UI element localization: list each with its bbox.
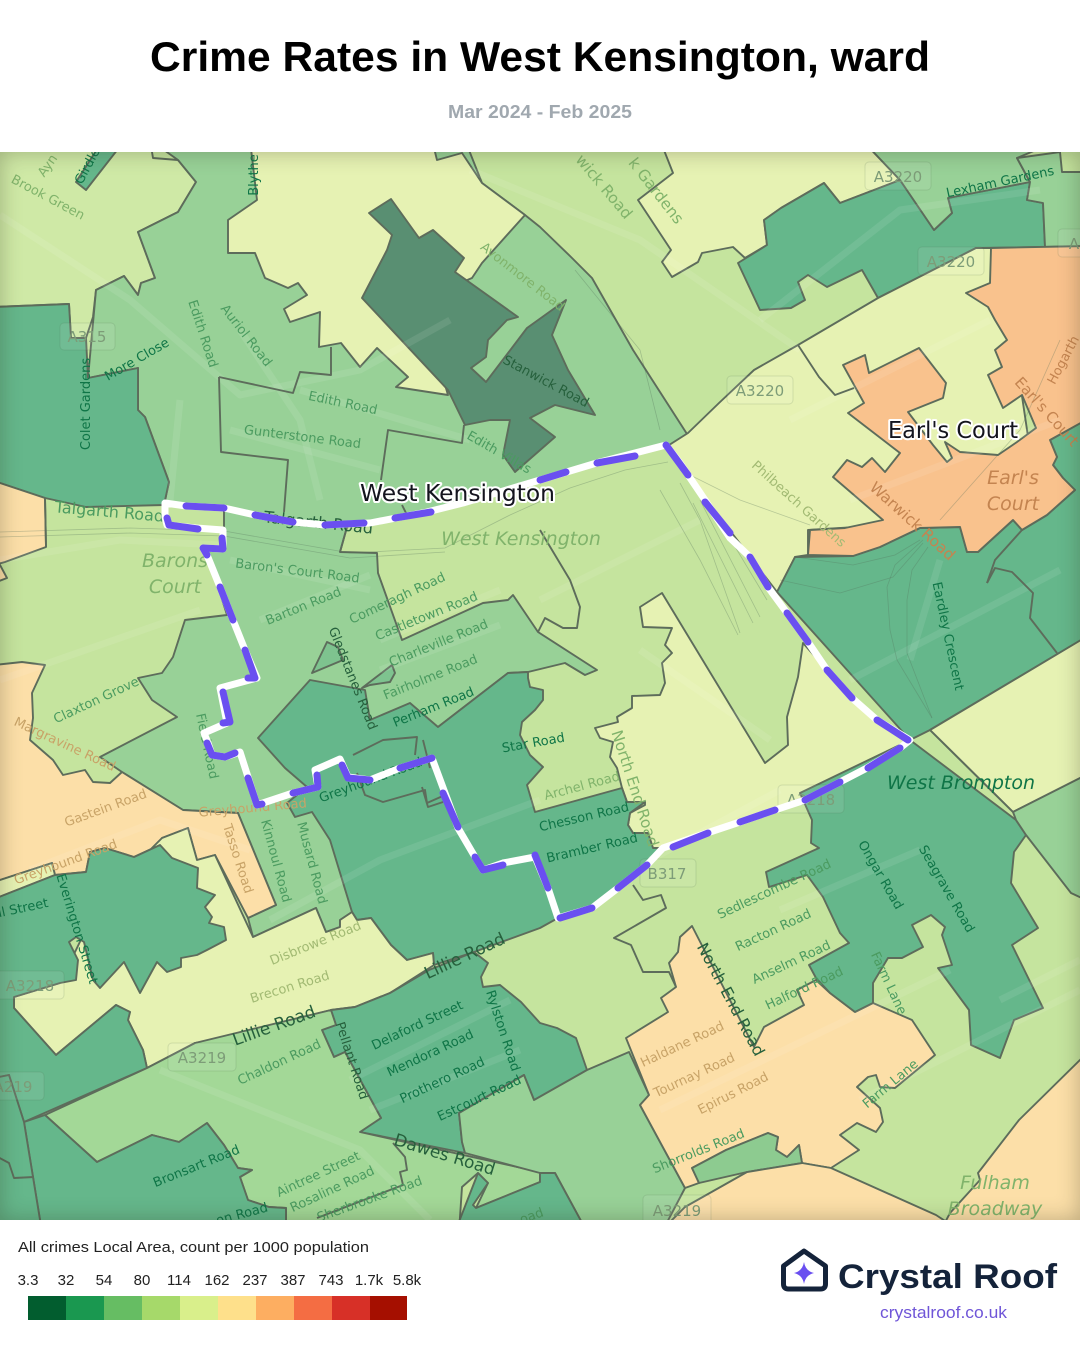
subtitle: date range: Mar 2024 - Feb 2025 bbox=[448, 102, 632, 122]
legend: colour scale: 5.8k bbox=[393, 1272, 422, 1289]
road name labels: Blythe bbox=[247, 154, 262, 196]
road name labels: Tournay Road bbox=[651, 1050, 737, 1102]
road name labels: Greyhound Road bbox=[198, 796, 307, 821]
road name labels: Star Road bbox=[501, 731, 566, 756]
station labels: Court bbox=[149, 576, 203, 598]
road shields: A3218 bbox=[787, 791, 835, 809]
road name labels: Baron's Court Road bbox=[234, 556, 360, 587]
station labels: Barons bbox=[142, 550, 208, 572]
road name labels: Delaford Street bbox=[369, 998, 466, 1054]
legend: colour scale: 743 bbox=[318, 1272, 344, 1289]
road name labels: More Close bbox=[102, 336, 172, 384]
road name labels: Perham Road bbox=[391, 685, 476, 731]
road name labels: Edith Road bbox=[307, 389, 379, 418]
legend title: All crimes Local Area, count per 1000 population bbox=[18, 1239, 369, 1256]
legend: colour scale: 237 bbox=[242, 1272, 268, 1289]
road shields: A3220 bbox=[736, 382, 784, 400]
road name labels: Musard Road bbox=[293, 820, 330, 906]
road name labels: Gledstanes Road bbox=[325, 625, 380, 732]
road name labels: Greyhound Road bbox=[317, 755, 424, 806]
road name labels: Bronsart Road bbox=[151, 1143, 242, 1191]
road name labels: Disbrowe Road bbox=[268, 919, 363, 969]
legend: colour scale: 32 bbox=[58, 1272, 74, 1289]
ward boundary: West Kensington bbox=[165, 445, 910, 918]
legend: colour scale: 80 bbox=[134, 1272, 150, 1289]
road name labels: Dawes Road bbox=[391, 1130, 497, 1180]
road name labels: Aintree Street bbox=[274, 1149, 363, 1201]
road shields: A3219 bbox=[178, 1049, 226, 1067]
road name labels: Rylston Road bbox=[482, 988, 523, 1073]
road shields: A3220 bbox=[927, 253, 975, 271]
road name labels: Tasso Road bbox=[219, 821, 256, 895]
station labels: West Kensington bbox=[441, 528, 601, 550]
road name labels: Claxton Grove bbox=[51, 674, 142, 727]
road name labels: Seagrave Road bbox=[915, 843, 977, 936]
road name labels: Chaldon Road bbox=[236, 1037, 324, 1089]
road name labels: Haldane Road bbox=[638, 1019, 727, 1071]
road name labels: Farm Lane bbox=[860, 1057, 921, 1112]
road name labels: Lillie Road bbox=[421, 929, 508, 984]
road name labels: Lillie Road bbox=[230, 1002, 319, 1051]
road name labels: Warwick Road bbox=[866, 478, 959, 564]
road shields: A3220 bbox=[874, 168, 922, 186]
road name labels: Pellant Road bbox=[332, 1020, 371, 1102]
map bbox=[0, 152, 1080, 1220]
road shields: B317 bbox=[648, 865, 686, 883]
road name labels: Halford Road bbox=[763, 964, 846, 1013]
website: crystalroof.co.uk bbox=[880, 1304, 1008, 1322]
road name labels: Talgarth Road bbox=[53, 497, 165, 526]
wordmark: Crystal Roof bbox=[838, 1258, 1058, 1296]
road name labels: k Gardens bbox=[625, 154, 687, 228]
road shields: A3219 bbox=[653, 1202, 701, 1220]
road name labels: Edith Road bbox=[184, 298, 220, 370]
icon: house with star bbox=[784, 1251, 826, 1289]
road casings bbox=[0, 170, 1080, 1220]
road name labels: Barton Road bbox=[264, 585, 344, 629]
road name labels: Eardley Crescent bbox=[929, 581, 966, 692]
road name labels: North End Road bbox=[693, 940, 769, 1059]
legend: colour scale: 387 bbox=[280, 1272, 306, 1289]
road name labels: Avonmore Road bbox=[477, 240, 567, 315]
legend: colour scale bbox=[18, 1272, 422, 1320]
legend: colour scale: 162 bbox=[204, 1272, 230, 1289]
road name labels: Kinnoul Road bbox=[257, 818, 294, 904]
road name labels: Edith Villas bbox=[464, 429, 534, 478]
road name labels: North End Road bbox=[607, 728, 662, 849]
station labels: Fulham bbox=[960, 1172, 1030, 1194]
road shields: A3218 bbox=[6, 977, 54, 995]
place names bbox=[360, 418, 1018, 507]
road name labels: Archel Road bbox=[543, 769, 622, 804]
road name labels: Comeragh Road bbox=[347, 570, 448, 628]
road name labels: Stanwick Road bbox=[500, 353, 591, 411]
legend: colour scale: 114 bbox=[167, 1272, 191, 1289]
legend: colour scale: 3.3 bbox=[18, 1272, 38, 1289]
road name labels: wick Road bbox=[572, 152, 636, 223]
road name labels: Epirus Road bbox=[696, 1070, 771, 1118]
road name labels: Ongar Road bbox=[854, 838, 906, 912]
logo: Crystal Roof bbox=[781, 1248, 1058, 1322]
road shields bbox=[0, 162, 1080, 1225]
road name labels: Lexham Gardens bbox=[945, 164, 1056, 201]
road name labels: Anselm Road bbox=[750, 938, 833, 988]
road name labels: Rosaline Road bbox=[288, 1164, 377, 1216]
place names: Earl's Court bbox=[888, 418, 1018, 444]
road name labels: Farm Lane bbox=[867, 950, 909, 1017]
station labels: Earl's bbox=[987, 467, 1039, 489]
place names: West Kensington bbox=[360, 481, 555, 507]
legend: colour scale: 54 bbox=[96, 1272, 112, 1289]
road name labels: Racton Road bbox=[733, 907, 814, 955]
road name labels: Greyhound Road bbox=[12, 837, 119, 888]
road name labels: Gunterstone Road bbox=[243, 423, 362, 452]
area boundary lines bbox=[0, 345, 1057, 1218]
legend: colour scale: 1.7k bbox=[355, 1272, 384, 1289]
purple dashes bbox=[167, 445, 908, 918]
station labels: Court bbox=[987, 493, 1041, 515]
road shields: A315 bbox=[68, 328, 106, 346]
road name labels: Sedlescombe Road bbox=[715, 857, 834, 923]
road shields: A bbox=[1069, 235, 1080, 253]
road name labels: Ayn bbox=[35, 152, 61, 180]
road name labels: Prothero Road bbox=[398, 1055, 487, 1107]
road name labels: Estcourt Road bbox=[435, 1073, 524, 1125]
road name labels: Margravine Road bbox=[11, 715, 118, 775]
station labels: Broadway bbox=[948, 1198, 1043, 1220]
station labels bbox=[142, 467, 1043, 1220]
railway lines bbox=[0, 270, 1060, 718]
road name labels: Bramber Road bbox=[545, 831, 639, 866]
road name labels: Brecon Road bbox=[249, 968, 331, 1007]
title: Crime Rates in West Kensington, ward bbox=[150, 33, 930, 80]
road name labels: Colet Gardens bbox=[79, 358, 94, 450]
road name labels: Mendora Road bbox=[385, 1027, 476, 1080]
road name labels: Chesson Road bbox=[538, 800, 631, 835]
road name labels: Talgarth Road bbox=[262, 507, 374, 538]
road name labels: Field Road bbox=[192, 712, 221, 780]
road name labels: Gastein Road bbox=[63, 787, 149, 831]
road name labels: Brook Green bbox=[8, 172, 87, 224]
road name labels: Philbeach Gardens bbox=[748, 458, 849, 551]
road name labels: Everington Street bbox=[52, 872, 100, 986]
road name labels: Fairholme Road bbox=[381, 652, 480, 703]
road name labels: Charleville Road bbox=[387, 617, 490, 670]
station labels: West Brompton bbox=[887, 772, 1035, 794]
road name labels: Shorrolds Road bbox=[650, 1126, 747, 1177]
road name labels: Auriol Road bbox=[217, 302, 275, 370]
road name labels: Castletown Road bbox=[373, 589, 480, 644]
